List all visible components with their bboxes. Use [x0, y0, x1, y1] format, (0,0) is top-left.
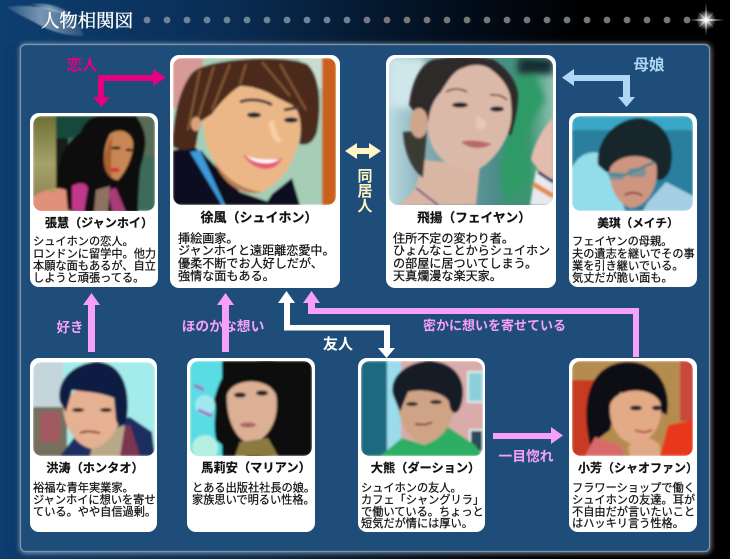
label: 同居人: 同 — [357, 168, 373, 185]
arrow: 密かに想いを寄せている — [303, 291, 639, 357]
arrow: 恋人 — [93, 69, 166, 107]
description: 馬莉安: とある出版社社長の娘。 — [192, 480, 315, 494]
photo: 小芳 — [572, 361, 693, 456]
name: 馬莉安: 馬莉安（マリアン） — [201, 460, 311, 475]
description: 小芳: 不自由だが言いたいこと — [572, 504, 695, 518]
icon: sparkle star — [690, 3, 724, 36]
arrow: 一目惚れ — [493, 427, 563, 444]
name: 洪涛: 洪涛（ホンタオ） — [46, 460, 144, 475]
description: 小芳: はハッキリ言う性格。 — [572, 516, 684, 530]
name: 大熊: 大熊（ダーション） — [371, 460, 480, 475]
name: 小芳: 小芳（シャオファン） — [578, 460, 698, 475]
description: 飛揚: 住所不定の変わり者。 — [393, 230, 514, 246]
description: 馬莉安 — [192, 480, 315, 506]
description: 大熊: カフェ「シャングリラ」 — [361, 492, 484, 506]
name: 飛揚: 飛揚（フェイヤン） — [417, 210, 531, 225]
description: 張慧: シュイホンの恋人。 — [33, 235, 134, 248]
description: 張慧: 本願な面もあるが、自立 — [33, 258, 156, 272]
description: 大熊 — [361, 480, 484, 530]
description: 小芳: シュイホンの友達。耳が — [572, 492, 695, 506]
decorative wing — [6, 3, 84, 36]
card: 洪涛 — [30, 358, 157, 532]
description: 徐風: 優柔不断でお人好しだが、 — [178, 256, 323, 270]
description: 美琪: フェイヤンの母親。 — [572, 235, 672, 248]
description: 大熊: 短気だが情には厚い。 — [361, 516, 473, 530]
label: 友人: 友人 — [323, 335, 353, 353]
card: 馬莉安 — [187, 358, 315, 532]
header band — [6, 3, 724, 36]
card: 小芳 — [569, 358, 698, 532]
description: 徐風 — [178, 230, 335, 283]
description: 徐風: 強情な面もある。 — [178, 269, 275, 283]
photo: 張慧 — [33, 116, 155, 212]
description: 大熊: シュイホンの友人。 — [361, 480, 462, 494]
description: 大熊: で働いている。ちょっと — [361, 506, 484, 518]
description: 飛揚: ひょんなことからシュイホン — [393, 244, 550, 258]
card: 飛揚 — [386, 55, 556, 288]
description: 洪涛 — [33, 480, 156, 518]
description: 小芳 — [572, 482, 695, 530]
photo: 徐風 — [173, 58, 336, 205]
description: 洪涛: 裕福な青年実業家。 — [33, 480, 134, 494]
description: 張慧 — [33, 235, 156, 284]
description: 小芳: フラワーショップで働く — [572, 482, 695, 494]
card: 徐風 — [170, 55, 340, 288]
description: 徐風: 挿絵画家。 — [178, 230, 238, 246]
arrow: 好き — [83, 293, 100, 352]
description: 美琪 — [572, 235, 695, 284]
label: 恋人: 恋人 — [66, 56, 98, 74]
description: 美琪: 気丈だが脆い面も。 — [572, 270, 673, 284]
name: 美琪: 美琪（メイチ） — [597, 216, 679, 230]
photo: 美琪 — [572, 116, 693, 211]
name: 徐風: 徐風（シュイホン） — [200, 210, 318, 225]
description: 飛揚: の部屋に居ついてしまう。 — [393, 256, 537, 270]
label: 密かに想いを寄せている: 密かに想いを寄せている — [423, 318, 566, 333]
card: 張慧 — [30, 113, 158, 287]
photo: 大熊 — [361, 361, 483, 456]
label: 同居人 — [357, 168, 373, 215]
description: 飛揚 — [393, 230, 550, 283]
description: 洪涛: ジャンホイに想いを寄せ — [33, 492, 156, 506]
label: 好き: 好き — [56, 320, 84, 335]
description: 張慧: ロンドンに留学中。他力 — [33, 246, 156, 260]
dotted line — [144, 17, 690, 23]
label: 一目惚れ: 一目惚れ — [498, 448, 554, 464]
description: 徐風: ジャンホイと遠距離恋愛中。 — [178, 242, 335, 258]
photo: 馬莉安 — [190, 361, 312, 461]
label: 母娘: 母娘 — [633, 56, 665, 74]
description: 美琪: 業を引き継いでいる。 — [572, 258, 684, 272]
arrow: ほのかな想い — [217, 293, 234, 352]
description: 張慧: しようと頑張ってる。 — [33, 272, 144, 284]
photo: 洪涛 — [33, 362, 155, 456]
name: 張慧: 張慧（ジャンホイ） — [45, 215, 153, 230]
description: 飛揚: 天真爛漫な楽天家。 — [393, 269, 502, 283]
arrow: 母娘 — [562, 69, 635, 107]
description: 馬莉安: 家族思いで明るい性格。 — [192, 492, 315, 506]
photo: 飛揚 — [389, 57, 553, 205]
card: 大熊 — [358, 358, 485, 532]
arrow: 友人 — [278, 291, 395, 358]
label: 同居人: 人 — [357, 198, 373, 215]
arrow: 同居 — [345, 143, 381, 159]
card: 美琪 — [569, 113, 697, 287]
label: ほのかな想い: ほのかな想い — [182, 318, 264, 334]
description: 洪涛: ている。やや自信過剰。 — [33, 504, 156, 518]
title: 人物相関図 — [41, 11, 133, 31]
label: 同居人: 居 — [357, 183, 373, 200]
description: 美琪: 夫の遺志を継いでその事 — [572, 246, 695, 260]
